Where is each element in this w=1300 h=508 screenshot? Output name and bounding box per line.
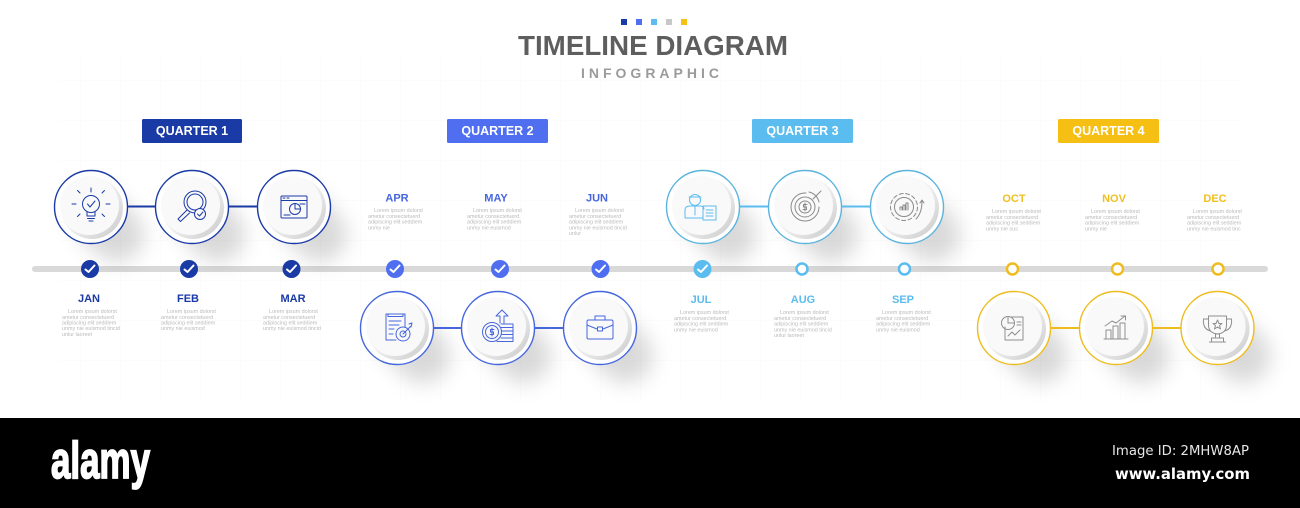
label: jun: ametur consectetuerd: [569, 214, 621, 220]
label: apr: APR: [385, 193, 409, 205]
title block: [518, 19, 788, 81]
circle: goal checklist: [360, 292, 434, 364]
label: mar: ametur consectetuerd: [263, 315, 315, 321]
website: www.alamy.com: [1115, 465, 1250, 483]
label: jan: unlur laoreet: [62, 332, 92, 338]
label: jan: Lorem ipsum dolorst: [68, 309, 117, 315]
label: dec: Lorem ipsum dolorst: [1193, 209, 1242, 215]
label: nov: adipiscing elit seddiem: [1085, 220, 1140, 226]
label: nov: NOV: [1102, 193, 1127, 205]
icon: coins with arrow: [482, 310, 513, 342]
subheading: INFOGRAPHIC: [581, 65, 719, 81]
label: jun: JUN: [586, 193, 608, 205]
label: aug: adipiscing elit seddiem: [774, 322, 829, 328]
label: may: ametur consectetuerd: [467, 214, 519, 220]
panel: quarter 3: [666, 119, 944, 339]
label: aug: [774, 294, 832, 339]
icon: person with report: [685, 194, 716, 220]
label: jan: JAN: [78, 293, 100, 305]
circle: money: [462, 292, 534, 364]
icon: light bulb: [72, 188, 110, 221]
marker: oct: [1007, 264, 1018, 274]
label: apr: ametur consectetuerd: [368, 214, 420, 220]
marker: jan: [81, 260, 99, 278]
label: jan: unmy nie euismod tincid: [62, 326, 120, 332]
label: may: adipiscing elit seddiem: [467, 220, 522, 226]
label: oct: adipiscing elit seddiem: [986, 220, 1041, 226]
quarter 3 badge: QUARTER 3: [766, 124, 839, 138]
label: nov: [1085, 193, 1140, 232]
label: aug: unmy nie euismod tincid: [774, 327, 832, 333]
label: dec: adipiscing elit seddiem: [1187, 220, 1242, 226]
label: mar: MAR: [280, 293, 306, 305]
circle: gear growth: [870, 170, 944, 244]
marker: aug: [796, 264, 808, 274]
label: oct: unmy nie sus: [986, 226, 1018, 232]
icon: briefcase: [587, 316, 613, 339]
label: jan: [62, 293, 120, 338]
marker: dec: [1212, 264, 1224, 274]
marker: mar: [282, 260, 300, 278]
label: jul: unmy nie euismod: [674, 327, 718, 333]
footer band: [0, 418, 1300, 508]
label: feb: Lorem ipsum dolorst: [167, 309, 216, 315]
label: jun: unmy nie euismod tincid: [569, 225, 627, 231]
label: mar: unmy nie euismod tincid: [263, 326, 321, 332]
label: may: unmy nie euismod: [467, 225, 511, 231]
label: apr: adipiscing elit seddiem: [368, 220, 423, 226]
label: aug: ametur consectetuerd: [774, 316, 826, 322]
circle: idea bulb: [54, 170, 128, 244]
label: feb: adipiscing elit seddiem: [161, 320, 216, 326]
icon: dollar target: [791, 191, 821, 221]
label: sep: [876, 294, 931, 333]
label: jan: ametur consectetuerd: [62, 315, 114, 321]
circle: magnifier: [156, 170, 228, 244]
panel: quarter 1: [54, 119, 330, 338]
label: feb: [161, 293, 216, 332]
label: apr: [368, 193, 423, 231]
circle: briefcase: [564, 292, 636, 364]
label: oct: [986, 193, 1041, 232]
marker: nov: [1112, 264, 1123, 274]
circle: report: [978, 292, 1050, 364]
quarter 1 connectors and shadows: [99, 206, 320, 235]
colour key squares: [621, 19, 687, 25]
label: may: MAY: [484, 193, 508, 205]
label: jul: JUL: [691, 294, 712, 306]
quarter 2 connectors and shadows: [405, 328, 626, 356]
quarter 3 badge: [752, 119, 853, 143]
icon: browser window: [281, 196, 307, 218]
label: mar: adipiscing elit seddiem: [263, 320, 318, 326]
label: jul: adipiscing elit seddiem: [674, 322, 729, 328]
label: aug: unlur laoreet: [774, 333, 804, 339]
icon: bars with arrow: [1104, 316, 1128, 339]
label: oct: Lorem ipsum dolorst: [992, 209, 1041, 215]
label: dec: unmy nie euismod tinc: [1187, 226, 1241, 232]
label: apr: Lorem ipsum dolorst: [374, 208, 423, 214]
circle: trophy: [1181, 292, 1254, 364]
label: sep: ametur consectetuerd: [876, 316, 928, 322]
circle: growth chart: [1080, 292, 1152, 364]
quarter 1 badge: [142, 119, 242, 143]
label: dec: ametur consectetuerd: [1187, 215, 1239, 221]
quarter 2 badge: QUARTER 2: [461, 124, 534, 138]
quarter 4 badge: [1058, 119, 1159, 143]
label: jul: [674, 294, 729, 333]
quarter 4 connectors and shadows: [1022, 328, 1244, 356]
label: sep: adipiscing elit seddiem: [876, 322, 931, 328]
label: jul: Lorem ipsum dolorst: [680, 310, 729, 316]
quarter 1 badge: QUARTER 1: [156, 124, 228, 138]
label: mar: [263, 293, 321, 332]
icon: checklist with target: [386, 314, 412, 341]
quarter 3 connectors and shadows: [711, 206, 933, 235]
label: dec: DEC: [1203, 193, 1227, 205]
label: oct: ametur consectetuerd: [986, 215, 1038, 221]
icon: magnifier with check: [178, 191, 206, 222]
circle: browser chart: [258, 170, 330, 244]
panel: quarter 2: [360, 119, 636, 364]
quarter 2 badge: [447, 119, 548, 143]
label: mar: Lorem ipsum dolorst: [269, 309, 318, 315]
label: jun: adipiscing elit seddiem: [569, 220, 624, 226]
label: jan: adipiscing elit seddiem: [62, 320, 117, 326]
label: jun: unlur: [569, 231, 581, 237]
label: sep: Lorem ipsum dolorst: [882, 310, 931, 316]
marker: jul: [694, 260, 712, 278]
label: sep: unmy nie euismod: [876, 327, 920, 333]
panel: quarter 4: [978, 119, 1254, 364]
label: aug: Lorem ipsum dolorst: [780, 310, 829, 316]
label: nov: ametur consectetuerd: [1085, 215, 1137, 221]
quarter 4 badge: QUARTER 4: [1072, 124, 1145, 138]
icon: chart report: [1002, 316, 1023, 340]
icon: trophy: [1203, 316, 1232, 342]
icon: gear with bars: [890, 194, 924, 220]
label: may: [467, 193, 522, 231]
label: jun: [569, 193, 627, 237]
label: oct: OCT: [1002, 193, 1026, 205]
label: sep: SEP: [892, 294, 914, 306]
label: nov: Lorem ipsum dolorst: [1091, 209, 1140, 215]
label: dec: [1187, 193, 1242, 232]
label: jun: Lorem ipsum dolorst: [575, 208, 624, 214]
circle: employee report: [666, 170, 740, 244]
marker: jun: [592, 260, 610, 278]
label: apr: unmy nie: [368, 225, 390, 231]
marker: feb: [180, 260, 198, 278]
label: aug: AUG: [791, 294, 815, 306]
timeline bar: [32, 266, 1268, 272]
label: jul: ametur consectetuerd: [674, 316, 726, 322]
image id: Image ID: 2MHW8AP: [1112, 443, 1249, 459]
label: may: Lorem ipsum dolorst: [473, 208, 522, 214]
heading: TIMELINE DIAGRAM: [518, 30, 788, 61]
marker: may: [491, 260, 509, 278]
marker: sep: [899, 264, 910, 274]
footer logo: alamy: [51, 432, 150, 490]
label: nov: unmy nie: [1085, 226, 1107, 232]
label: feb: unmy nie euismod: [161, 326, 205, 332]
label: feb: ametur consectetuerd: [161, 315, 213, 321]
marker: apr: [386, 260, 404, 278]
label: feb: FEB: [177, 293, 199, 305]
circle: money cycle: [768, 170, 842, 244]
